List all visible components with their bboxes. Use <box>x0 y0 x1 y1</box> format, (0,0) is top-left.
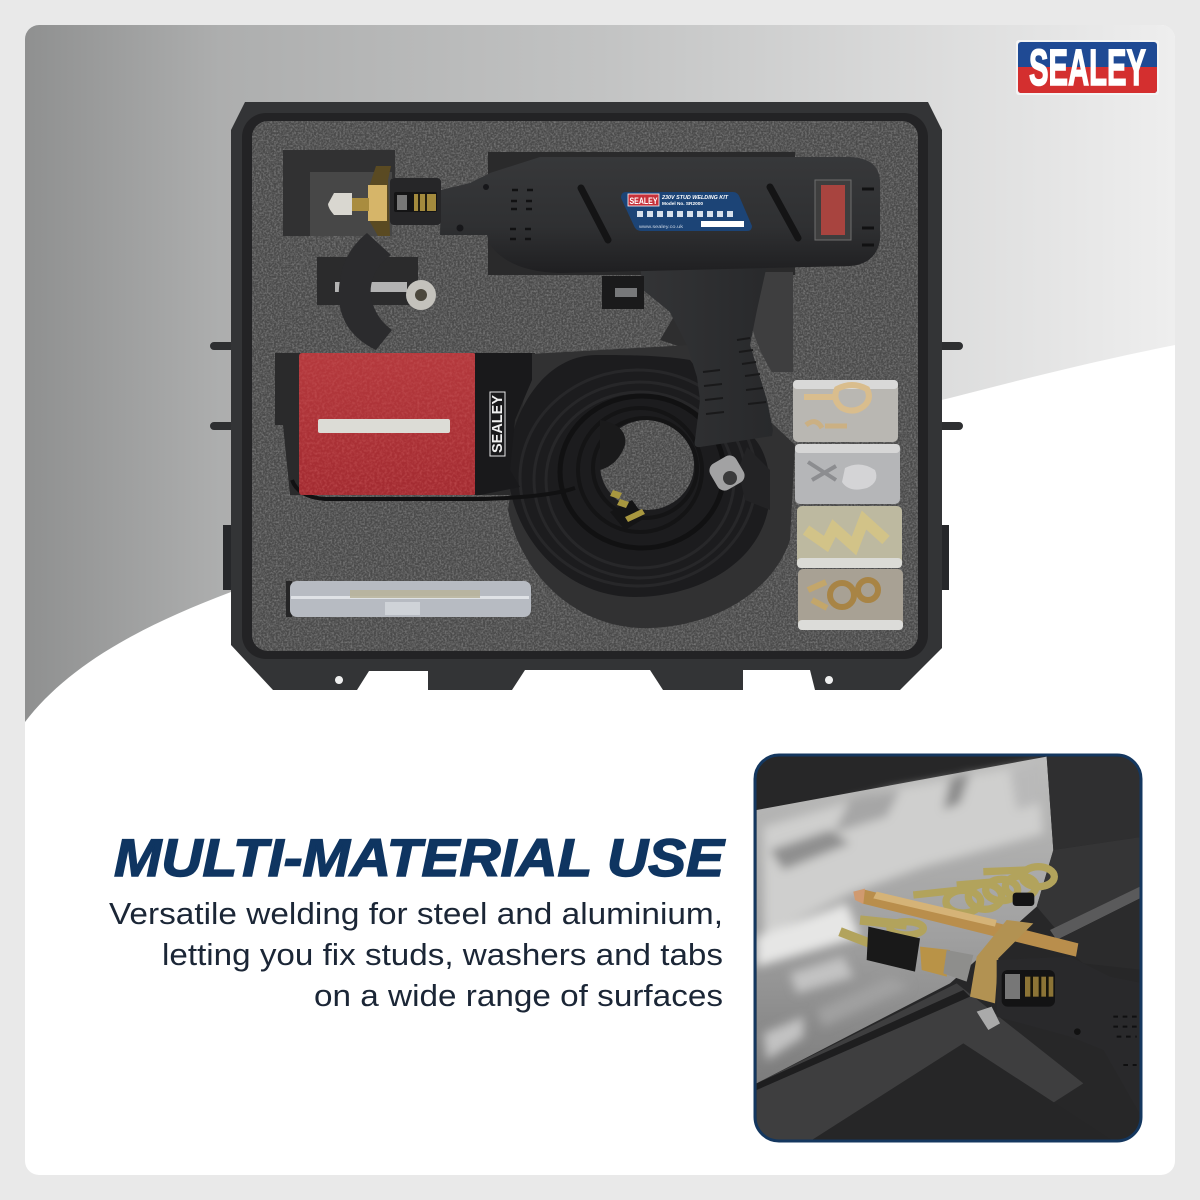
description text: Versatile welding for steel and aluminium, <box>109 896 723 931</box>
case handles and latches <box>210 342 963 430</box>
case screw holes <box>335 676 833 684</box>
brass clamp plate <box>368 166 391 236</box>
brass tabs <box>840 867 1054 943</box>
gun pocket <box>488 152 795 275</box>
tool: curved shield attachment <box>335 233 436 350</box>
coil centre showing foam <box>600 420 694 510</box>
knurled section <box>943 950 973 982</box>
foam insert <box>252 121 918 651</box>
brass neck <box>352 198 369 211</box>
black grip <box>867 927 920 972</box>
photo frame <box>755 755 1141 1141</box>
clear boxes of consumables <box>793 380 903 630</box>
brass rod <box>862 889 1078 957</box>
gun window <box>1002 970 1055 1007</box>
gun right vents <box>862 189 874 245</box>
description text: letting you fix studs, washers and tabs <box>162 937 723 972</box>
gun vents <box>1113 1017 1137 1065</box>
gun handle <box>640 265 773 447</box>
case inner rim <box>242 113 928 659</box>
heading: MULTI-MATERIAL USE <box>114 829 726 888</box>
gun body <box>440 157 880 273</box>
braid sleeve and connector <box>738 447 770 510</box>
nozzle pocket <box>283 150 395 236</box>
gun display <box>815 180 851 240</box>
right dark panel <box>1046 756 1054 850</box>
red control box <box>299 353 532 495</box>
brass barrel <box>920 947 950 977</box>
bolt <box>977 1007 1000 1030</box>
lower sill <box>757 983 1083 1143</box>
gun label: SEALEY <box>630 196 658 206</box>
gun pivot box <box>602 276 644 309</box>
red control box: SEALEY <box>489 395 506 453</box>
silver tip <box>328 193 352 215</box>
gun nose <box>996 960 1000 1018</box>
gun label: www.sealey.co.uk <box>639 224 684 229</box>
braided sleeve <box>508 355 770 597</box>
tray of studs <box>286 581 531 617</box>
coil pocket <box>508 345 795 628</box>
body slots <box>581 187 798 240</box>
case outer shell <box>231 102 942 690</box>
tool pocket <box>317 257 418 305</box>
gun label: 230V STUD WELDING KIT <box>661 195 729 201</box>
gun label: Model No. SR2000 <box>662 201 704 206</box>
brass clamp <box>970 920 1033 1003</box>
black thumb wheel <box>1013 893 1034 906</box>
grey swoosh background <box>25 25 1175 722</box>
screw heads <box>483 184 489 190</box>
control box pocket <box>275 353 535 495</box>
brass block <box>368 185 387 221</box>
plug pins <box>610 490 645 522</box>
gun label <box>621 192 752 231</box>
description text <box>109 896 723 1013</box>
sanded metal panel <box>757 757 1053 1083</box>
carry case <box>210 102 963 690</box>
description text: on a wide range of surfaces <box>314 978 723 1013</box>
welding gun <box>328 157 880 510</box>
gun nose <box>390 178 441 225</box>
power cable coil <box>292 355 770 597</box>
mains cable <box>292 480 575 499</box>
metal highlights <box>757 763 1043 1060</box>
photo: welding on metal panel <box>750 750 1150 1150</box>
vents <box>510 190 542 239</box>
